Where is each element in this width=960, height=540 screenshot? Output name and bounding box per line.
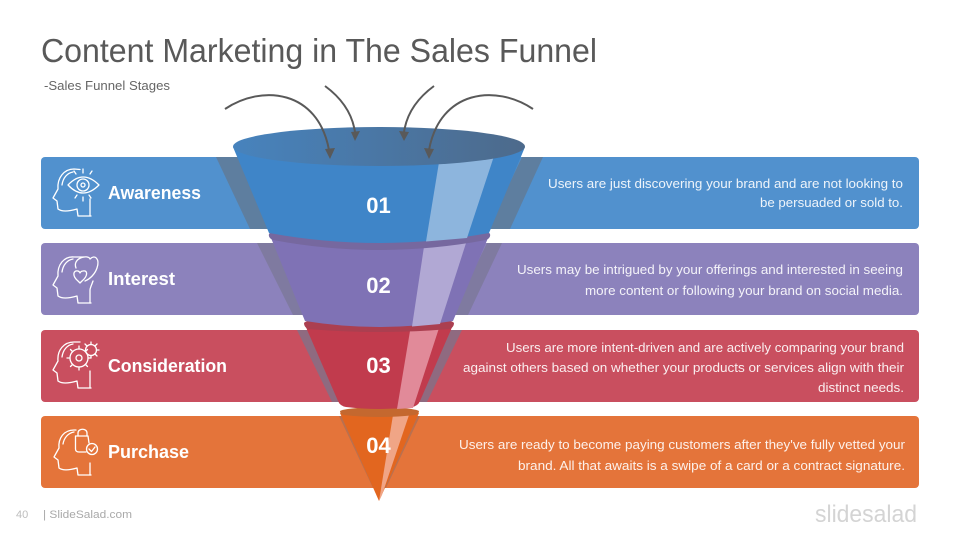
text: consideration description: Users are more intent-driven and are actively comparing your brand — [506, 340, 904, 355]
panel: consideration bar — [41, 330, 919, 402]
text: consideration description: distinct needs. — [818, 380, 904, 395]
arrow 3 — [399, 86, 434, 141]
arrow 4 — [424, 95, 533, 159]
panel: awareness bar — [41, 157, 919, 229]
number 02: 02 — [366, 273, 391, 298]
funnel tier 4 — [340, 407, 419, 501]
text: purchase description — [459, 437, 906, 473]
icon: head with gears — [53, 342, 99, 388]
funnel shadows on bars — [216, 157, 543, 488]
arrow 2 — [325, 86, 360, 141]
subtitle: -Sales Funnel Stages — [44, 79, 170, 93]
text: awareness description — [548, 176, 903, 210]
icon: head with shopping bag — [54, 429, 98, 475]
icon: head with eye — [53, 169, 99, 216]
label: Interest: Interest — [108, 269, 175, 289]
label: Awareness: Awareness — [108, 183, 201, 203]
arrow 1 — [225, 95, 335, 159]
funnel tier 2 — [269, 226, 490, 327]
number 01: 01 — [366, 193, 391, 218]
text: interest description — [517, 262, 903, 298]
label: Purchase: Purchase — [108, 442, 189, 462]
text: awareness description: Users are just discovering your brand and are not looking to — [548, 176, 903, 191]
text: interest description: Users may be intrigued by your offerings and interested in seeing — [517, 262, 903, 277]
funnel tier 1 — [233, 127, 525, 243]
number 03: 03 — [366, 353, 391, 378]
text: awareness description: be persuaded or sold to. — [760, 195, 903, 210]
number 04: 04 — [366, 433, 391, 458]
text: purchase description: Users are ready to become paying customers after they've fully vetted your — [459, 437, 906, 452]
footer: logo: slidesalad — [815, 501, 917, 528]
panel: purchase bar — [41, 416, 919, 488]
funnel tier 3 — [304, 316, 454, 409]
footer: site: | SlideSalad.com — [43, 509, 132, 521]
text: consideration description: against others based on whether your products or services align with their — [463, 360, 905, 375]
title: Content Marketing in The Sales Funnel — [41, 32, 597, 69]
footer: page number: 40 — [16, 509, 28, 521]
text: purchase description: brand. All that awaits is a swipe of a card or a contract signature. — [518, 458, 905, 473]
text: consideration description — [463, 340, 905, 395]
text: interest description: more content or following your brand on social media. — [585, 283, 903, 298]
icon: head with heart — [53, 257, 98, 303]
panel: interest bar — [41, 243, 919, 315]
label: Consideration: Consideration — [108, 356, 227, 376]
